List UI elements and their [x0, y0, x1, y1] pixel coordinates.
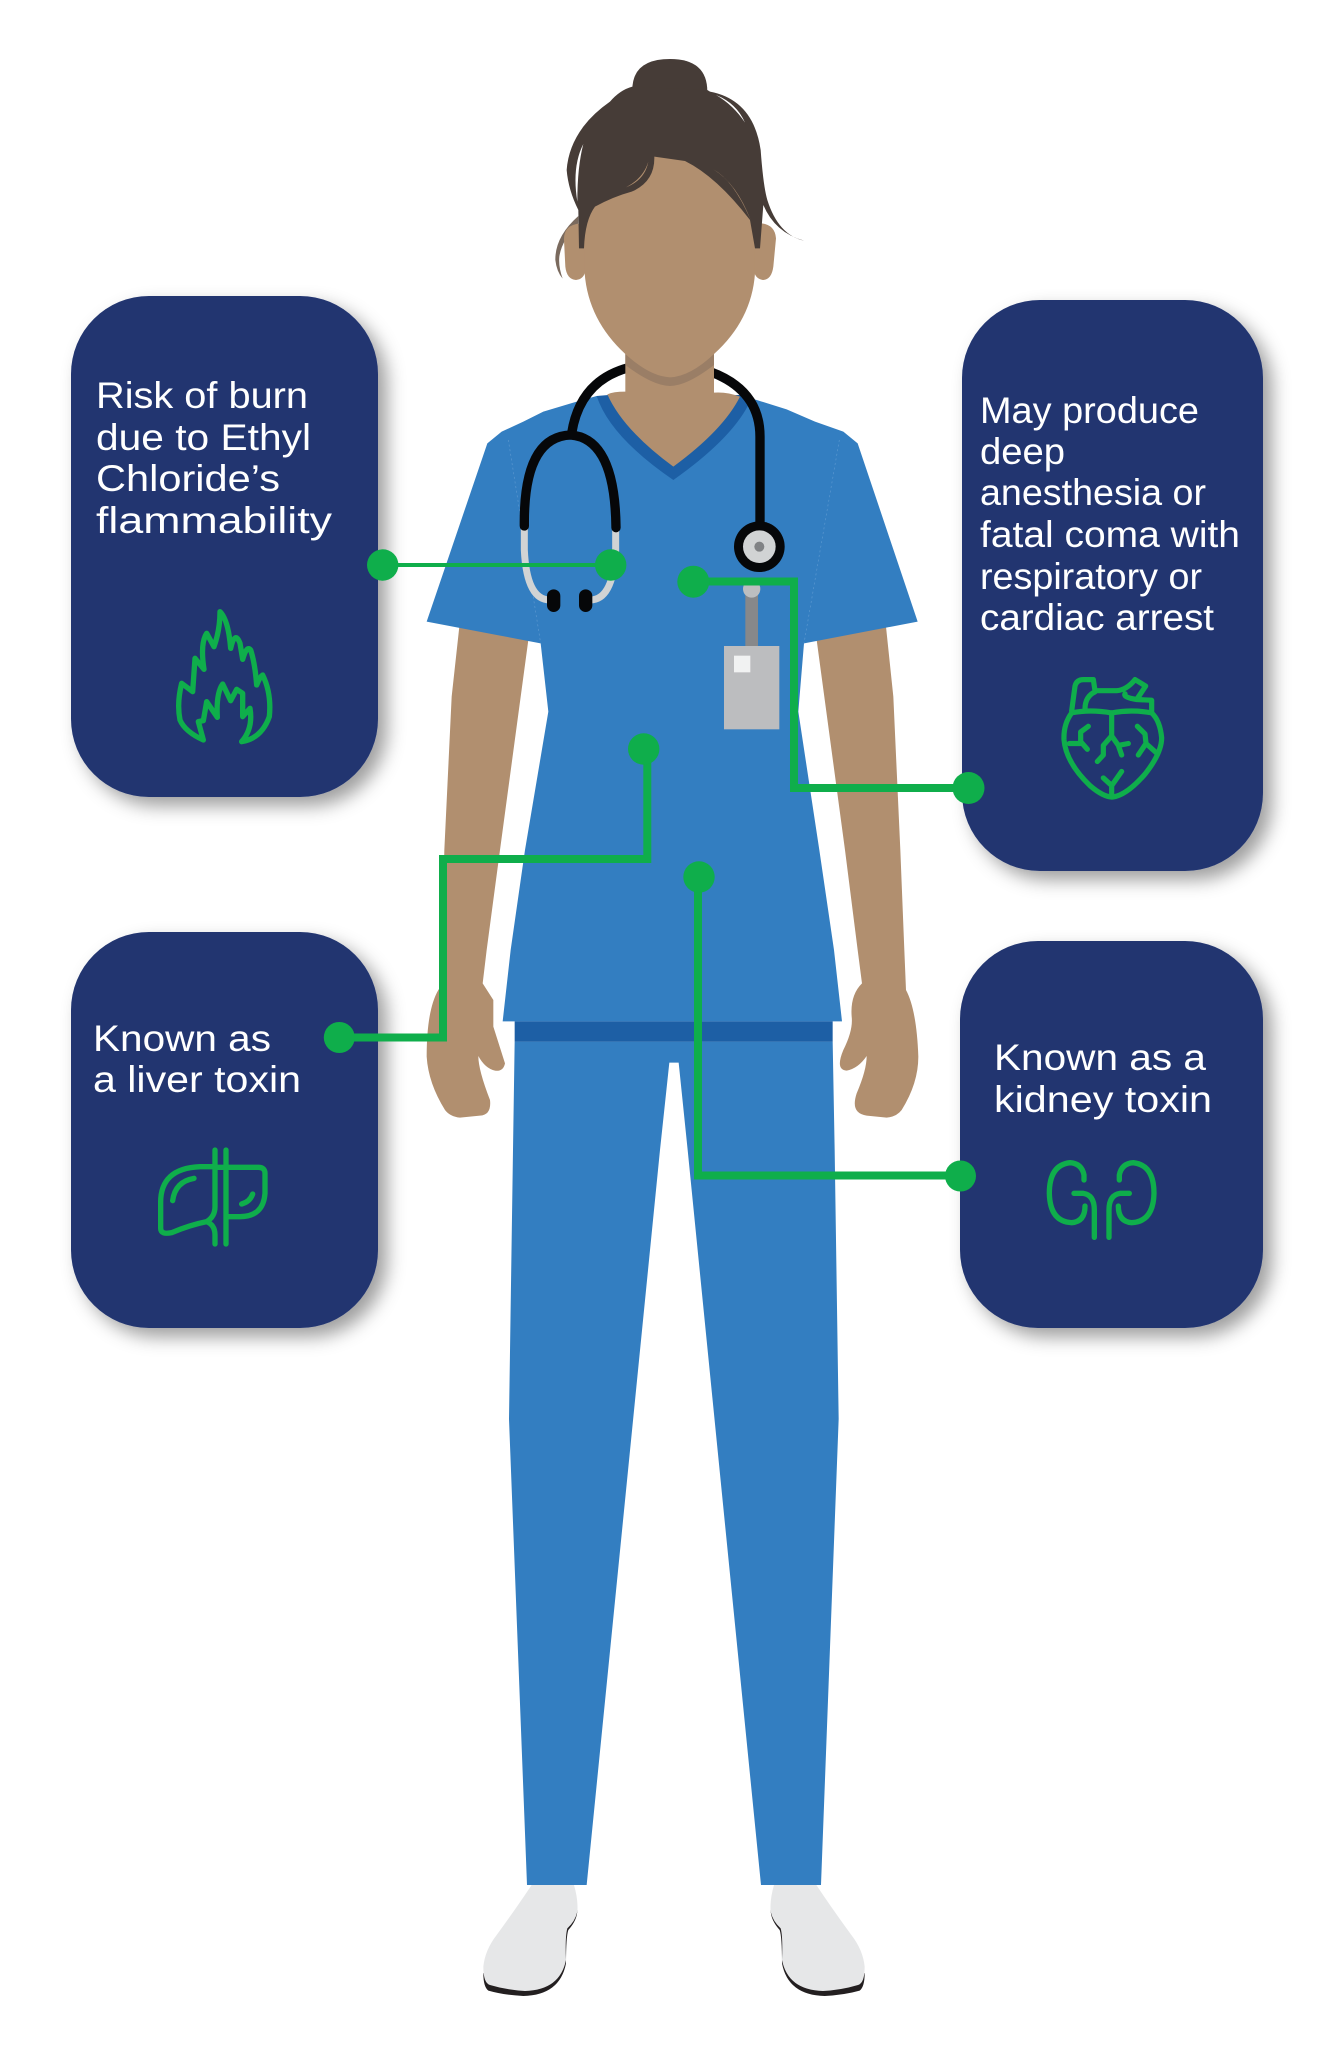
text: anesthesia risk: deep	[980, 431, 1065, 472]
right arm and hand	[817, 627, 918, 1118]
chin shadow	[625, 354, 714, 386]
text: liver toxin: Known as	[93, 1018, 271, 1059]
text: burn risk: flammability	[96, 500, 333, 541]
ID badge	[724, 580, 779, 729]
stray hair	[555, 216, 578, 279]
connector: kidney toxin	[683, 861, 976, 1192]
pants	[509, 1042, 839, 1885]
hair	[567, 59, 804, 248]
icon: kidneys	[1049, 1163, 1154, 1237]
text: burn risk: due to Ethyl	[96, 417, 311, 458]
text: anesthesia risk	[980, 390, 1240, 638]
right shoe	[770, 1885, 865, 1996]
text: liver toxin: a liver toxin	[93, 1059, 301, 1100]
scrub top	[427, 395, 918, 1021]
panel: burn risk	[71, 296, 378, 797]
text: burn risk	[96, 375, 333, 541]
face	[585, 153, 755, 377]
text: anesthesia risk: cardiac arrest	[980, 597, 1215, 638]
icon: heart	[1064, 680, 1162, 797]
figure: nurse	[427, 59, 918, 1996]
text: liver toxin	[93, 1018, 301, 1100]
connector: anesthesia risk	[677, 566, 984, 804]
icon: flame	[179, 612, 270, 742]
connector: liver toxin	[324, 733, 659, 1053]
head	[555, 59, 804, 386]
panel: anesthesia risk	[962, 300, 1263, 871]
left arm and hand	[427, 627, 528, 1118]
text: anesthesia risk: May produce	[980, 390, 1199, 431]
panel: kidney toxin	[960, 941, 1263, 1328]
stethoscope chest piece	[734, 521, 785, 572]
text: kidney toxin	[994, 1037, 1212, 1120]
text: burn risk: Risk of burn	[96, 375, 308, 416]
stethoscope neck tube	[572, 367, 760, 527]
connector: burn risk	[367, 549, 626, 581]
text: burn risk: Chloride’s	[96, 458, 280, 499]
left shoe	[483, 1885, 578, 1996]
text: kidney toxin: Known as a	[994, 1037, 1206, 1078]
text: anesthesia risk: anesthesia or	[980, 472, 1206, 513]
ears	[564, 223, 776, 280]
shoes	[483, 1885, 865, 1996]
waistband	[515, 1021, 833, 1042]
neck and chest	[607, 340, 740, 467]
seam lines	[508, 440, 839, 643]
text: kidney toxin: kidney toxin	[994, 1079, 1212, 1120]
text: anesthesia risk: fatal coma with	[980, 514, 1240, 555]
stethoscope earpieces	[524, 435, 616, 612]
text: anesthesia risk: respiratory or	[980, 556, 1202, 597]
collar trim	[597, 395, 748, 480]
icon: liver	[161, 1150, 265, 1244]
panel: liver toxin	[71, 932, 378, 1328]
